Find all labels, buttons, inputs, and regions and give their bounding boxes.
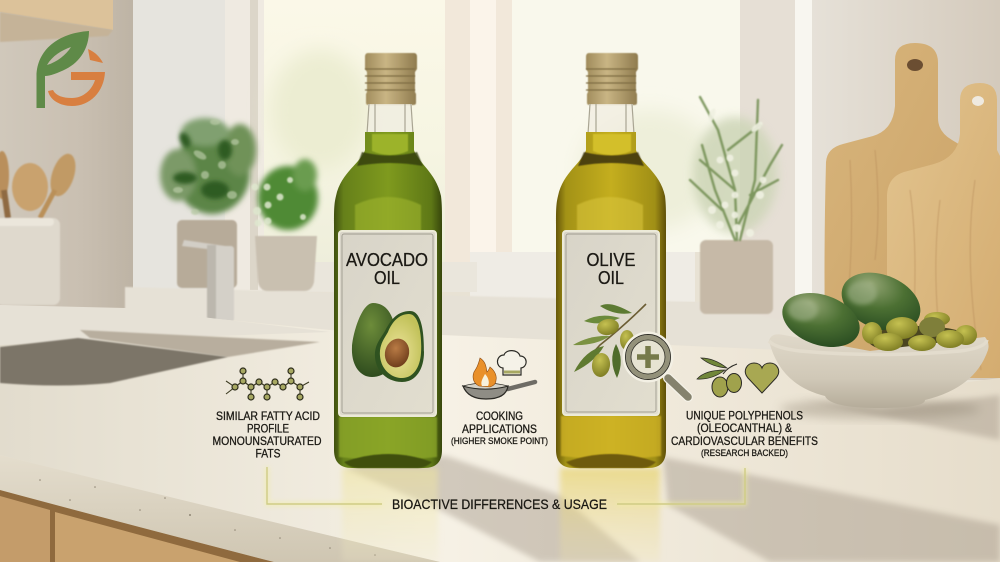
olives in bowl	[862, 312, 977, 351]
sunlight shadows and bottle reflections on counter	[342, 395, 1000, 562]
heading: bioactive differences and usage: BIOACTIVE DIFFERENCES & USAGE	[392, 496, 607, 512]
caption: polyphenols and cardiovascular benefits	[671, 410, 818, 458]
connector bracket lines	[267, 467, 745, 504]
cutting boards	[824, 43, 1000, 378]
caption: polyphenols and cardiovascular benefits: (RESEARCH BACKED)	[701, 448, 788, 458]
avocado in bowl, rear	[833, 262, 929, 342]
caption: fatty acid profile: SIMILAR FATTY ACID	[216, 411, 320, 423]
label text: oil: OIL	[598, 268, 624, 288]
caption: fatty acid profile	[212, 411, 322, 460]
fruit bowl with avocados and olives	[769, 262, 989, 419]
caption: cooking applications	[451, 411, 548, 446]
caption: cooking applications: (HIGHER SMOKE POINT)	[451, 436, 548, 446]
caption: cooking applications: COOKING	[476, 411, 523, 423]
countertop	[0, 305, 1000, 562]
icon: olive branch	[573, 304, 646, 378]
icon: avocado halves	[352, 303, 424, 382]
caption: cooking applications: APPLICATIONS	[462, 424, 537, 436]
caption: fatty acid profile: FATS	[256, 448, 281, 460]
caption: polyphenols and cardiovascular benefits: (OLEOCANTHAL) &	[697, 423, 792, 435]
left kitchen decor: utensils and crock	[0, 151, 80, 305]
sink faucet	[182, 240, 234, 323]
logo	[36, 31, 105, 108]
icon: olives and heart	[697, 358, 779, 397]
label text: oil: OIL	[374, 268, 400, 288]
icon: magnifying glass with plus	[622, 332, 688, 397]
avocado in bowl, front	[775, 283, 867, 357]
caption: polyphenols and cardiovascular benefits: CARDIOVASCULAR BENEFITS	[671, 436, 818, 448]
icon: flame, chef hat and pan	[463, 351, 535, 399]
caption: fatty acid profile: MONOUNSATURATED	[212, 436, 322, 448]
left potted plants	[160, 118, 318, 291]
label text: avocado: AVOCADO	[346, 250, 428, 270]
olive oil bottle	[556, 53, 666, 468]
label text: olive: OLIVE	[586, 250, 636, 270]
avocado oil bottle	[334, 53, 442, 468]
right potted plant	[690, 97, 782, 314]
caption: polyphenols and cardiovascular benefits: UNIQUE POLYPHENOLS	[686, 410, 803, 422]
icon: fatty acid molecule	[226, 368, 309, 400]
caption: fatty acid profile: PROFILE	[247, 424, 289, 436]
